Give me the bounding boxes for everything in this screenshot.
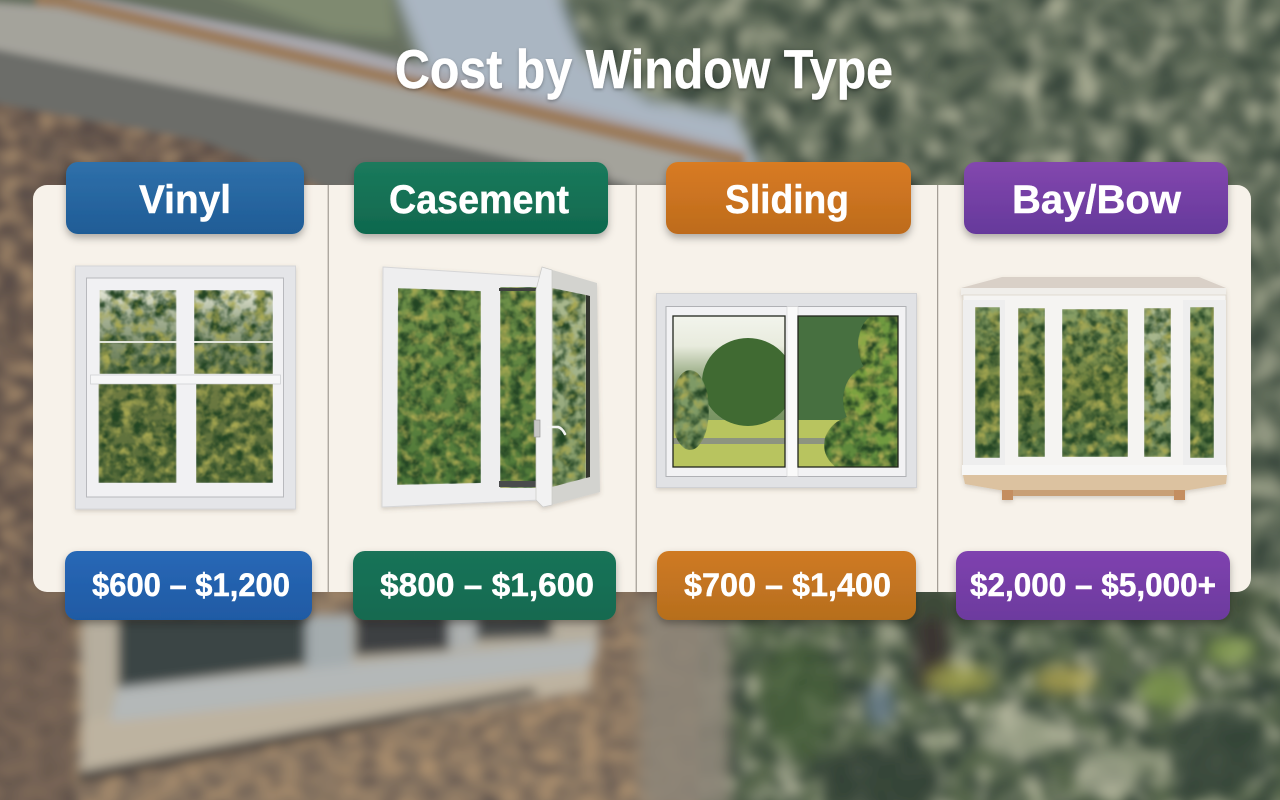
heading badge: Sliding xyxy=(666,162,911,234)
price badge: Sliding: $700 – $1,400 xyxy=(684,567,891,603)
price badge: Bay/Bow: $2,000 – $5,000+ xyxy=(970,567,1216,603)
column divider 1 xyxy=(328,185,329,592)
price badge: Sliding xyxy=(657,551,916,620)
column: Bay/Bow xyxy=(956,162,1230,620)
price badge: Vinyl: $600 – $1,200 xyxy=(92,567,290,603)
heading badge: Casement: Casement xyxy=(389,178,569,222)
icon: casement window, open sash xyxy=(382,267,600,507)
heading badge: Casement xyxy=(354,162,608,234)
column divider 3 xyxy=(937,185,938,592)
price badge: Vinyl xyxy=(65,551,312,620)
heading badge: Sliding: Sliding xyxy=(725,178,849,222)
column: Casement xyxy=(353,162,616,620)
price badge: Casement xyxy=(353,551,616,620)
heading badge: Vinyl: Vinyl xyxy=(139,178,231,222)
heading badge: Vinyl xyxy=(66,162,304,234)
price badge: Bay/Bow xyxy=(956,551,1230,620)
column: Vinyl xyxy=(65,162,312,620)
column: Sliding xyxy=(656,162,916,620)
icon: sliding window xyxy=(656,294,916,488)
price badge: Casement: $800 – $1,600 xyxy=(380,567,594,603)
heading badge: Bay/Bow: Bay/Bow xyxy=(1012,178,1182,222)
column divider 2 xyxy=(636,185,637,592)
icon: double-hung vinyl window xyxy=(76,266,296,509)
heading badge: Bay/Bow xyxy=(964,162,1228,234)
icon: bay window xyxy=(961,277,1227,500)
panel: comparison card xyxy=(33,185,1251,592)
title: Cost by Window Type xyxy=(395,38,893,100)
